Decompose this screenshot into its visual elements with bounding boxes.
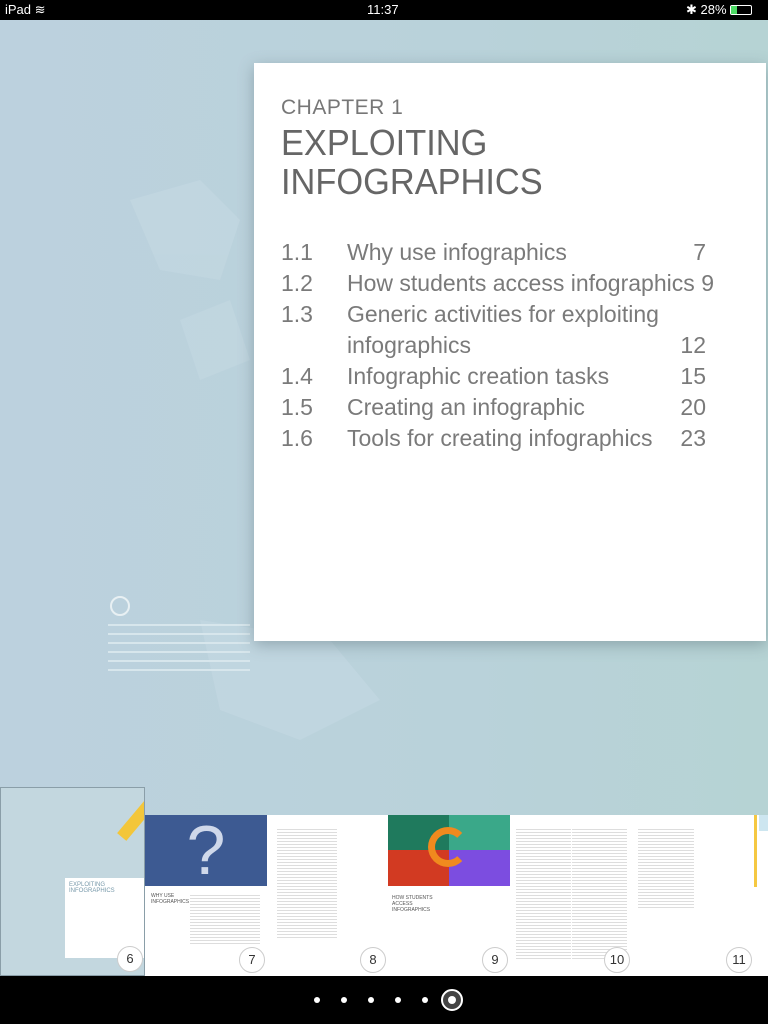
table of contents: 9	[701, 270, 714, 296]
thumbnail: page 11: 11	[732, 952, 746, 967]
table of contents: 12	[680, 332, 706, 358]
thumbnail: page 7: WHY USE	[151, 893, 174, 899]
thumbnail: page 8	[267, 815, 388, 976]
table of contents: 1.6	[281, 425, 313, 451]
table of contents: Infographic creation tasks	[347, 363, 609, 389]
table of contents: 20	[680, 394, 706, 420]
table of contents: 1.2	[281, 270, 313, 296]
chapter card	[254, 63, 766, 641]
thumbnail: page 9 puzzle: ACCESS	[392, 901, 413, 907]
thumbnail: page 7: 7	[248, 952, 256, 967]
chapter label: CHAPTER 1	[281, 96, 403, 119]
table of contents: Tools for creating infographics	[347, 425, 653, 451]
thumbnail: page 7	[145, 815, 267, 976]
table of contents: infographics	[347, 332, 471, 358]
status bar: iPad ≋	[5, 2, 46, 17]
chapter title	[281, 122, 543, 202]
chapter title: INFOGRAPHICS	[281, 161, 543, 202]
table of contents: 23	[680, 425, 706, 451]
thumbnail: page 7: INFOGRAPHICS	[151, 899, 189, 905]
table of contents: 7	[693, 239, 706, 265]
thumbnail: page 10	[510, 815, 632, 976]
chapter title: EXPLOITING	[281, 122, 487, 163]
table of contents: 1.4	[281, 363, 313, 389]
status bar: 11:37	[367, 2, 399, 17]
table of contents: Creating an infographic	[347, 394, 585, 420]
background map decoration	[108, 596, 250, 671]
thumbnail: page 6 cover: EXPLOITING INFOGRAPHICS	[69, 882, 115, 894]
table of contents: 15	[680, 363, 706, 389]
table of contents: 1.3	[281, 301, 313, 327]
thumbnail: page 10: 10	[610, 952, 624, 967]
thumbnail: page 9 puzzle: HOW STUDENTS	[392, 895, 433, 901]
status bar: ✱ 28%	[686, 2, 727, 17]
table of contents	[281, 239, 714, 451]
table of contents: 1.5	[281, 394, 313, 420]
thumbnail: page 12 partial	[754, 815, 768, 976]
table of contents: Generic activities for exploiting	[347, 301, 659, 327]
table of contents: 1.1	[281, 239, 313, 265]
thumbnail: page 9 puzzle	[388, 815, 510, 976]
thumbnail: page 9 puzzle: INFOGRAPHICS	[392, 907, 430, 913]
thumbnail: page 8: 8	[369, 952, 377, 967]
status bar	[0, 0, 768, 20]
thumbnail: page 11	[632, 815, 754, 976]
table of contents: How students access infographics	[347, 270, 695, 296]
thumbnail: page 9 puzzle: 9	[491, 952, 499, 967]
bottom bar with page dots	[0, 976, 768, 1024]
table of contents: Why use infographics	[347, 239, 567, 265]
thumbnail: page 6 cover: 6	[126, 951, 134, 966]
thumbnail: page 6 cover	[0, 787, 145, 976]
